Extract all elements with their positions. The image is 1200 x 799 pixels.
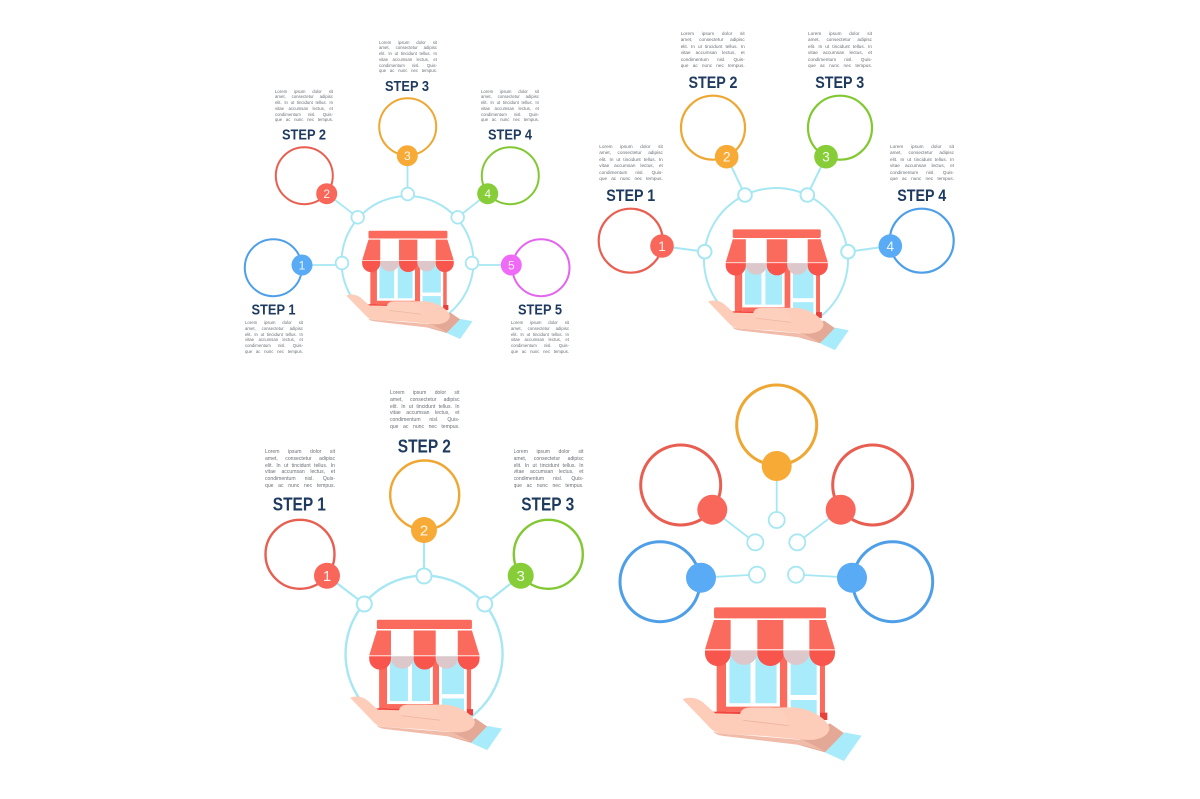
text block: step 1: amet, consectetur adipisc: [599, 150, 663, 155]
text block: step 5: amet, consectetur adipisc: [511, 326, 569, 331]
text block: step 5: condimentum nisl. Quis-: [511, 343, 569, 348]
heading: step 4: STEP 4: [897, 187, 947, 205]
text block: step 2: vitae accumsan lectus, et: [275, 106, 333, 111]
text block: step 1: que ac nunc nec tempus.: [245, 349, 303, 354]
central ring with nodes and links: [662, 157, 890, 318]
text block: step 3: [808, 31, 872, 71]
step 3 circle: [808, 96, 872, 168]
step 1 circle: [245, 239, 312, 296]
heading: step 3: STEP 3: [385, 78, 429, 95]
heading: step 5: STEP 5: [518, 301, 562, 318]
text block: step 3: condimentum nisl. Quis-: [808, 57, 872, 62]
step 1 circle: 1: [323, 568, 331, 585]
text block: step 2: amet, consectetur adipisc: [681, 37, 745, 42]
step 1 circle: 1: [299, 258, 306, 272]
text block: step 1: elit. In ut tincidunt tellus. In: [265, 463, 335, 469]
heading: step 1: STEP 1: [606, 187, 655, 205]
lower left circle: [620, 542, 716, 622]
text block: step 3: Lorem ipsum dolor sit: [808, 31, 872, 36]
heading: step 4: STEP 4: [488, 127, 533, 144]
text block: step 2: elit. In ut tincidunt tellus. In: [681, 44, 745, 49]
text block: step 1: Lorem ipsum dolor sit: [265, 449, 335, 455]
heading: step 2: STEP 2: [688, 74, 738, 92]
text block: step 5: [511, 320, 569, 356]
step 1 circle: [266, 520, 340, 589]
text block: step 5: Lorem ipsum dolor sit: [511, 320, 569, 325]
step 3 circle: [379, 98, 436, 166]
text block: step 1: que ac nunc nec tempus.: [599, 176, 663, 181]
text block: step 4: [481, 88, 539, 124]
icon: store on hand: [350, 620, 502, 750]
text block: step 3: [514, 449, 584, 491]
text block: step 3: que ac nunc nec tempus.: [808, 63, 872, 68]
text block: step 1: condimentum nisl. Quis-: [599, 170, 663, 175]
icon: store on hand: [346, 231, 473, 339]
text block: step 1: elit. In ut tincidunt tellus. In: [245, 332, 303, 336]
step 2 circle: [681, 96, 745, 168]
step 3 circle: 3: [404, 149, 411, 163]
heading: step 3: STEP 3: [815, 74, 864, 92]
text block: step 2: condimentum nisl. Quis-: [275, 112, 333, 116]
text block: step 4: vitae accumsan lectus, et: [890, 163, 954, 168]
text block: step 1: vitae accumsan lectus, et: [265, 469, 335, 475]
step 5 circle: [501, 239, 570, 296]
text block: step 1: [245, 320, 303, 356]
text block: step 4: amet, consectetur adipisc: [481, 94, 539, 99]
heading: step 3: STEP 3: [521, 495, 574, 515]
panel: blank template diagram: [620, 385, 933, 761]
text block: step 5: vitae accumsan lectus, et: [511, 337, 569, 342]
text block: step 3: vitae accumsan lectus, et: [808, 50, 872, 55]
links and nodes: [701, 466, 852, 583]
text block: step 3: Lorem ipsum dolor sit: [514, 449, 584, 455]
text block: step 2: condimentum nisl. Quis-: [681, 57, 745, 62]
step 4 circle: [878, 209, 954, 273]
step 2 circle: 2: [723, 150, 730, 165]
step 3 circle: 3: [822, 150, 830, 165]
text block: step 5: elit. In ut tincidunt tellus. In: [511, 332, 569, 336]
panel: five step diagram: [245, 40, 570, 356]
top circle: [737, 385, 817, 481]
text block: step 1: Lorem ipsum dolor sit: [599, 144, 663, 149]
text block: step 3: elit. In ut tincidunt tellus. In: [808, 44, 872, 49]
step 2 circle: 2: [420, 522, 428, 540]
text block: step 3: vitae accumsan lectus, et: [379, 57, 437, 62]
text block: step 3: condimentum nisl. Quis-: [379, 62, 437, 68]
text block: step 3: [379, 40, 437, 76]
heading: step 2: STEP 2: [398, 436, 451, 456]
text block: step 4: que ac nunc nec tempus.: [481, 117, 539, 122]
step 4 circle: 4: [887, 239, 895, 254]
step 2 circle: 2: [323, 187, 330, 201]
text block: step 4: elit. In ut tincidunt tellus. In: [481, 100, 539, 105]
text block: step 1: [265, 449, 335, 491]
text block: step 2: vitae accumsan lectus, et: [681, 50, 745, 55]
text block: step 2: amet, consectetur adipisc: [275, 94, 333, 99]
text block: step 2: [390, 390, 460, 432]
text block: step 1: condimentum nisl. Quis-: [265, 476, 335, 482]
lower right circle: [837, 542, 933, 622]
step 2 circle: [276, 147, 337, 204]
icon: store on hand: [683, 607, 862, 761]
text block: step 5: que ac nunc nec tempus.: [511, 349, 569, 354]
text block: step 4: que ac nunc nec tempus.: [890, 176, 954, 181]
step 4 circle: [477, 147, 539, 204]
text block: step 1: vitae accumsan lectus, et: [245, 337, 303, 342]
text block: step 2: que ac nunc nec tempus.: [275, 117, 333, 122]
text block: step 3: que ac nunc nec tempus.: [379, 68, 437, 73]
step 5 circle: 5: [508, 258, 515, 272]
text block: step 2: [275, 88, 333, 124]
text block: step 3: que ac nunc nec tempus.: [514, 483, 584, 489]
heading: step 2: STEP 2: [282, 127, 326, 144]
heading: step 1: STEP 1: [252, 301, 296, 318]
text block: step 2: vitae accumsan lectus, et: [390, 410, 460, 416]
icon: store on hand: [708, 229, 849, 350]
text block: step 3: condimentum nisl. Quis-: [514, 476, 584, 482]
text block: step 2: que ac nunc nec tempus.: [390, 424, 460, 430]
text block: step 3: amet, consectetur adipisc: [808, 37, 872, 42]
heading: step 1: STEP 1: [273, 495, 326, 515]
text block: step 2: [681, 31, 745, 71]
text block: step 1: condimentum nisl. Quis-: [245, 343, 303, 348]
text block: step 4: Lorem ipsum dolor sit: [890, 144, 954, 149]
text block: step 4: elit. In ut tincidunt tellus. In: [890, 157, 954, 162]
step 3 circle: [508, 520, 583, 589]
step 1 circle: 1: [658, 239, 666, 254]
panel: three step diagram: [265, 390, 584, 750]
panel: four step diagram: [599, 31, 954, 350]
text block: step 1: Lorem ipsum dolor sit: [245, 320, 303, 325]
text block: step 3: Lorem ipsum dolor sit: [379, 40, 437, 44]
upper right circle: [826, 445, 913, 525]
text block: step 3: amet, consectetur adipisc: [514, 456, 584, 462]
central ring with nodes and links: [327, 530, 521, 717]
text block: step 1: que ac nunc nec tempus.: [265, 483, 335, 489]
text block: step 4: amet, consectetur adipisc: [890, 150, 954, 155]
text block: step 4: condimentum nisl. Quis-: [890, 170, 954, 175]
text block: step 2: Lorem ipsum dolor sit: [275, 88, 333, 94]
text block: step 1: elit. In ut tincidunt tellus. In: [599, 157, 663, 162]
text block: step 2: condimentum nisl. Quis-: [390, 417, 460, 423]
text block: step 3: elit. In ut tincidunt tellus. In: [379, 51, 437, 56]
central ring with nodes and links: [302, 156, 511, 315]
text block: step 3: amet, consectetur adipisc: [379, 45, 437, 50]
text block: step 2: elit. In ut tincidunt tellus. In: [275, 100, 333, 105]
text block: step 3: vitae accumsan lectus, et: [514, 469, 584, 475]
text block: step 2: amet, consectetur adipisc: [390, 397, 460, 403]
text block: step 3: elit. In ut tincidunt tellus. In: [514, 463, 584, 469]
text block: step 1: amet, consectetur adipisc: [265, 456, 335, 462]
text block: step 2: Lorem ipsum dolor sit: [390, 390, 460, 396]
step 2 circle: [390, 460, 459, 543]
text block: step 4: vitae accumsan lectus, et: [481, 106, 539, 111]
text block: step 2: Lorem ipsum dolor sit: [681, 31, 745, 36]
text block: step 4: Lorem ipsum dolor sit: [481, 88, 539, 94]
text block: step 1: amet, consectetur adipisc: [245, 326, 303, 331]
text block: step 4: [890, 144, 954, 184]
text block: step 4: condimentum nisl. Quis-: [481, 112, 539, 116]
text block: step 1: vitae accumsan lectus, et: [599, 163, 663, 168]
text block: step 1: [599, 144, 663, 184]
step 3 circle: 3: [517, 568, 525, 585]
step 4 circle: 4: [484, 187, 491, 201]
text block: step 2: elit. In ut tincidunt tellus. In: [390, 404, 460, 410]
step 1 circle: [599, 209, 674, 273]
upper left circle: [641, 445, 727, 525]
text block: step 2: que ac nunc nec tempus.: [681, 63, 745, 68]
